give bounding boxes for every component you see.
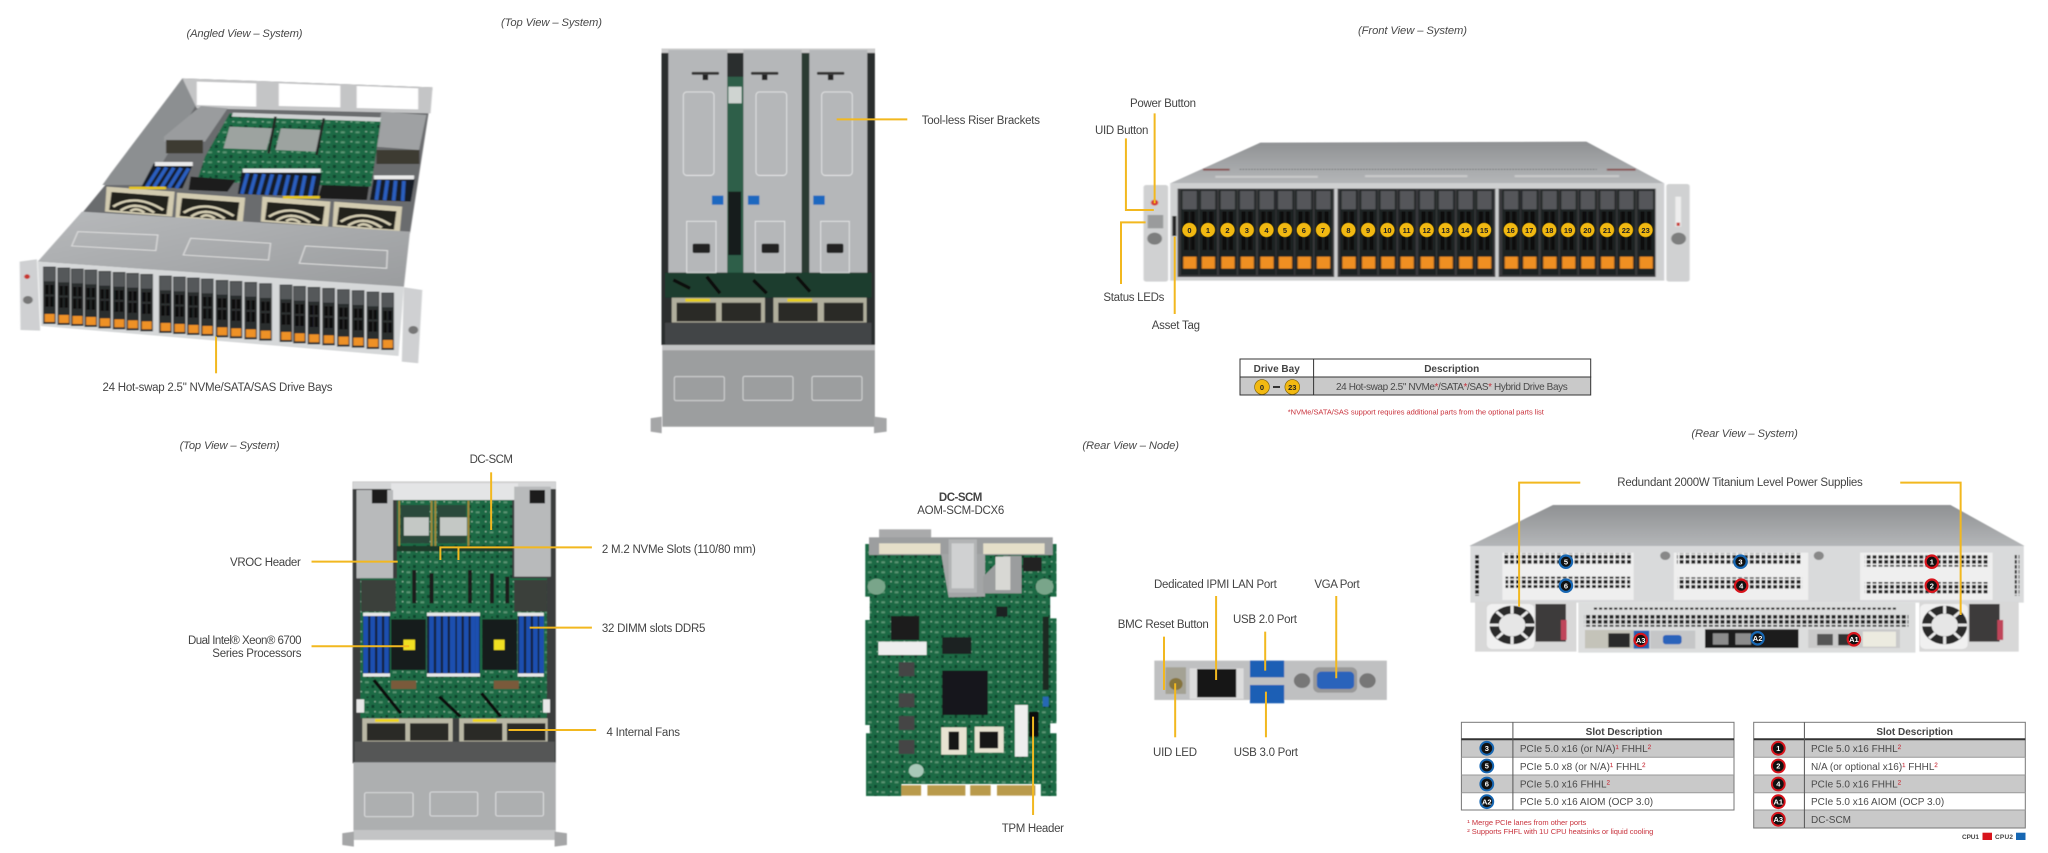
slot number badges: A3: [1636, 636, 1645, 645]
drive bay number badges: 14: [1461, 226, 1470, 235]
illustration: rear chassis: [1469, 505, 2025, 653]
view caption: front view: (Front View – System): [1358, 25, 1467, 37]
panel: angled view of server: [20, 78, 433, 394]
legend: CPU colours: [1962, 833, 2026, 841]
drive bay number badges: 13: [1441, 226, 1450, 235]
label: power supplies: Redundant 2000W Titanium Level Power Supplies: [1617, 477, 1863, 489]
table: CPU2 slots: PCIe 5.0 x16 AIOM (OCP 3.0): [1520, 797, 1653, 808]
table: drive bay description: 23: [1288, 383, 1296, 392]
label: riser brackets: Tool-less Riser Brackets: [922, 115, 1040, 127]
footnotes: slot notes: [1467, 818, 1653, 836]
drive bay number badges: 12: [1423, 226, 1431, 235]
label: BMC reset button: BMC Reset Button: [1118, 619, 1209, 631]
slot number badges: 6: [1564, 582, 1568, 590]
slot number badges: 4: [1739, 582, 1744, 590]
arrow: riser bracket leader: [837, 118, 907, 120]
arrow: drive bays leader: [215, 337, 217, 373]
drive bay number badges: 11: [1403, 226, 1411, 235]
drive bay number badges: 6: [1302, 226, 1306, 235]
table: CPU1 slots: [1754, 722, 2025, 828]
label: IPMI LAN port: Dedicated IPMI LAN Port: [1154, 579, 1278, 591]
view caption: angled view: (Angled View – System): [186, 28, 303, 40]
arrows: I/O leaders: [1164, 596, 1336, 737]
table: CPU2 slots: PCIe 5.0 x8 (or N/A)¹ FHHL²: [1520, 762, 1646, 773]
table: CPU1 slots: 4: [1776, 780, 1781, 789]
drive bay number badges: 3: [1245, 226, 1249, 235]
table: CPU1 slots: A3: [1774, 815, 1783, 824]
drive bay number badges: [1182, 223, 1653, 237]
drive bay number badges: 0: [1187, 226, 1191, 235]
drive bay number badges: 10: [1383, 226, 1392, 235]
illustration: DC-SCM board: [865, 529, 1057, 796]
footnotes: slot notes: ¹ Merge PCIe lanes from other ports: [1467, 818, 1587, 827]
label: power button: Power Button: [1130, 98, 1196, 110]
slot number badges: A2: [1753, 634, 1762, 643]
label: processors: Dual Intel® Xeon® 6700: [188, 635, 302, 647]
table: CPU2 slots: 5: [1485, 762, 1489, 771]
table: CPU1 slots: 1: [1776, 744, 1780, 753]
slot number badges: 5: [1564, 558, 1568, 566]
table: CPU2 slots: 3: [1485, 744, 1489, 753]
table: CPU1 slots: A1: [1774, 797, 1783, 806]
table: CPU2 slots: [1461, 722, 1734, 810]
label: UID LED: UID LED: [1153, 747, 1197, 759]
table: drive bay description: Drive Bay: [1254, 364, 1300, 375]
drive bay number badges: 18: [1545, 226, 1553, 235]
label: drive bays: 24 Hot-swap 2.5" NVMe/SATA/SAS Drive Bays: [102, 382, 333, 394]
drive bay number badges: 16: [1507, 226, 1515, 235]
drive bay number badges: 4: [1264, 226, 1269, 235]
heading: DC-SCM: AOM-SCM-DCX6: [917, 505, 1004, 517]
view caption: rear view system: (Rear View – System): [1691, 428, 1798, 440]
footnotes: slot notes: ² Supports FHFL with 1U CPU heatsinks or liquid cooling: [1467, 827, 1653, 836]
heading: DC-SCM: [917, 492, 1004, 517]
illustration: chassis with risers: [651, 48, 887, 433]
drive bay number badges: 1: [1206, 226, 1210, 235]
drive bay number badges: 9: [1366, 226, 1370, 235]
slot number badges: A1: [1849, 635, 1859, 644]
drive bay number badges: 20: [1583, 226, 1592, 235]
slot number badges: 1: [1930, 558, 1934, 566]
panel: front view of server: [1095, 98, 1690, 332]
drive bay number badges: 19: [1564, 226, 1572, 235]
table: CPU1 slots: DC-SCM: [1811, 815, 1851, 826]
illustration: front chassis: [1144, 142, 1690, 282]
drive bay number badges: 23: [1641, 226, 1650, 235]
table: CPU1 slots: PCIe 5.0 x16 FHHL²: [1811, 780, 1902, 790]
label: M.2 slots: 2 M.2 NVMe Slots (110/80 mm): [602, 544, 756, 556]
drive bay number badges: 5: [1283, 226, 1287, 235]
arrows: top view leaders: [312, 472, 596, 730]
drive bay number badges: 21: [1603, 226, 1611, 235]
label: TPM header: TPM Header: [1002, 823, 1064, 835]
table: CPU1 slots: N/A (or optional x16)¹ FHHL²: [1811, 762, 1938, 773]
label: processors: Series Processors: [212, 648, 302, 660]
drive bay number badges: 17: [1525, 226, 1533, 235]
label: DC-SCM: DC-SCM: [470, 454, 513, 466]
label: USB 3.0 port: USB 3.0 Port: [1234, 747, 1299, 759]
slot number badges: 3: [1738, 558, 1743, 566]
table: drive bay description: Description: [1424, 364, 1479, 375]
table: CPU2 slots: A2: [1482, 797, 1492, 806]
panel: DC-SCM module: [865, 492, 1064, 835]
view caption: rear view node: (Rear View – Node): [1082, 440, 1179, 452]
label: VROC header: VROC Header: [230, 557, 301, 569]
note: optional parts: *NVMe/SATA/SAS support requires additional parts from the optional parts list: [1288, 408, 1545, 416]
label: processors: [188, 635, 302, 660]
drive bay number badges: 15: [1480, 226, 1488, 235]
table: CPU1 slots: 2: [1776, 762, 1780, 771]
label: VGA port: VGA Port: [1314, 579, 1360, 591]
drive bay number badges: 8: [1346, 226, 1350, 235]
table: CPU2 slots: PCIe 5.0 x16 (or N/A)¹ FHHL²: [1520, 744, 1652, 755]
panel: top view with riser brackets: [651, 48, 1040, 433]
heading: DC-SCM: DC-SCM: [939, 492, 982, 504]
table: CPU2 slots: Slot Description: [1586, 727, 1662, 738]
label: internal fans: 4 Internal Fans: [606, 727, 680, 739]
label: DIMM slots: 32 DIMM slots DDR5: [602, 623, 705, 635]
panel: node rear I/O: [1118, 579, 1387, 759]
view caption: top view upper: (Top View – System): [501, 17, 602, 29]
label: asset tag: Asset Tag: [1152, 320, 1200, 332]
label: UID button: UID Button: [1095, 125, 1148, 137]
table: CPU2 slots: PCIe 5.0 x16 FHHL²: [1520, 780, 1611, 790]
illustration: motherboard top view: [342, 482, 567, 847]
legend: CPU colours: CPU2: [1995, 834, 2013, 841]
label: USB 2.0 port: USB 2.0 Port: [1233, 614, 1298, 626]
table: CPU2 slots: 6: [1485, 780, 1489, 789]
drive bay number badges: 22: [1622, 226, 1630, 235]
legend: CPU colours: CPU1: [1962, 834, 1979, 841]
illustration: I/O panel: [1154, 661, 1387, 703]
arrows: power supply leaders: [1519, 483, 1961, 615]
slot number badges: 2: [1930, 582, 1934, 590]
table: CPU1 slots: Slot Description: [1876, 727, 1953, 738]
table: drive bay description: 0: [1260, 383, 1264, 392]
panel: rear view of server: [1469, 477, 2025, 653]
table: CPU1 slots: PCIe 5.0 x16 AIOM (OCP 3.0): [1811, 797, 1944, 808]
drive bay number badges: 7: [1321, 226, 1325, 235]
slot number badges: [1560, 556, 1938, 646]
panel: internal top view: [188, 454, 756, 847]
arrow: TPM leader: [1032, 717, 1034, 815]
table: CPU1 slots: PCIe 5.0 x16 FHHL²: [1811, 744, 1902, 755]
arrows: front panel leaders: [1121, 113, 1175, 314]
view caption: top view lower: (Top View – System): [180, 440, 280, 452]
illustration: angled chassis: [20, 78, 433, 363]
drive bay number badges: 2: [1225, 226, 1230, 235]
table: drive bay description: 24 Hot-swap 2.5" NVMe*/SATA*/SAS* Hybrid Drive Bays: [1336, 382, 1568, 393]
table: drive bay description: [1240, 359, 1591, 395]
label: status LEDs: Status LEDs: [1103, 292, 1165, 304]
